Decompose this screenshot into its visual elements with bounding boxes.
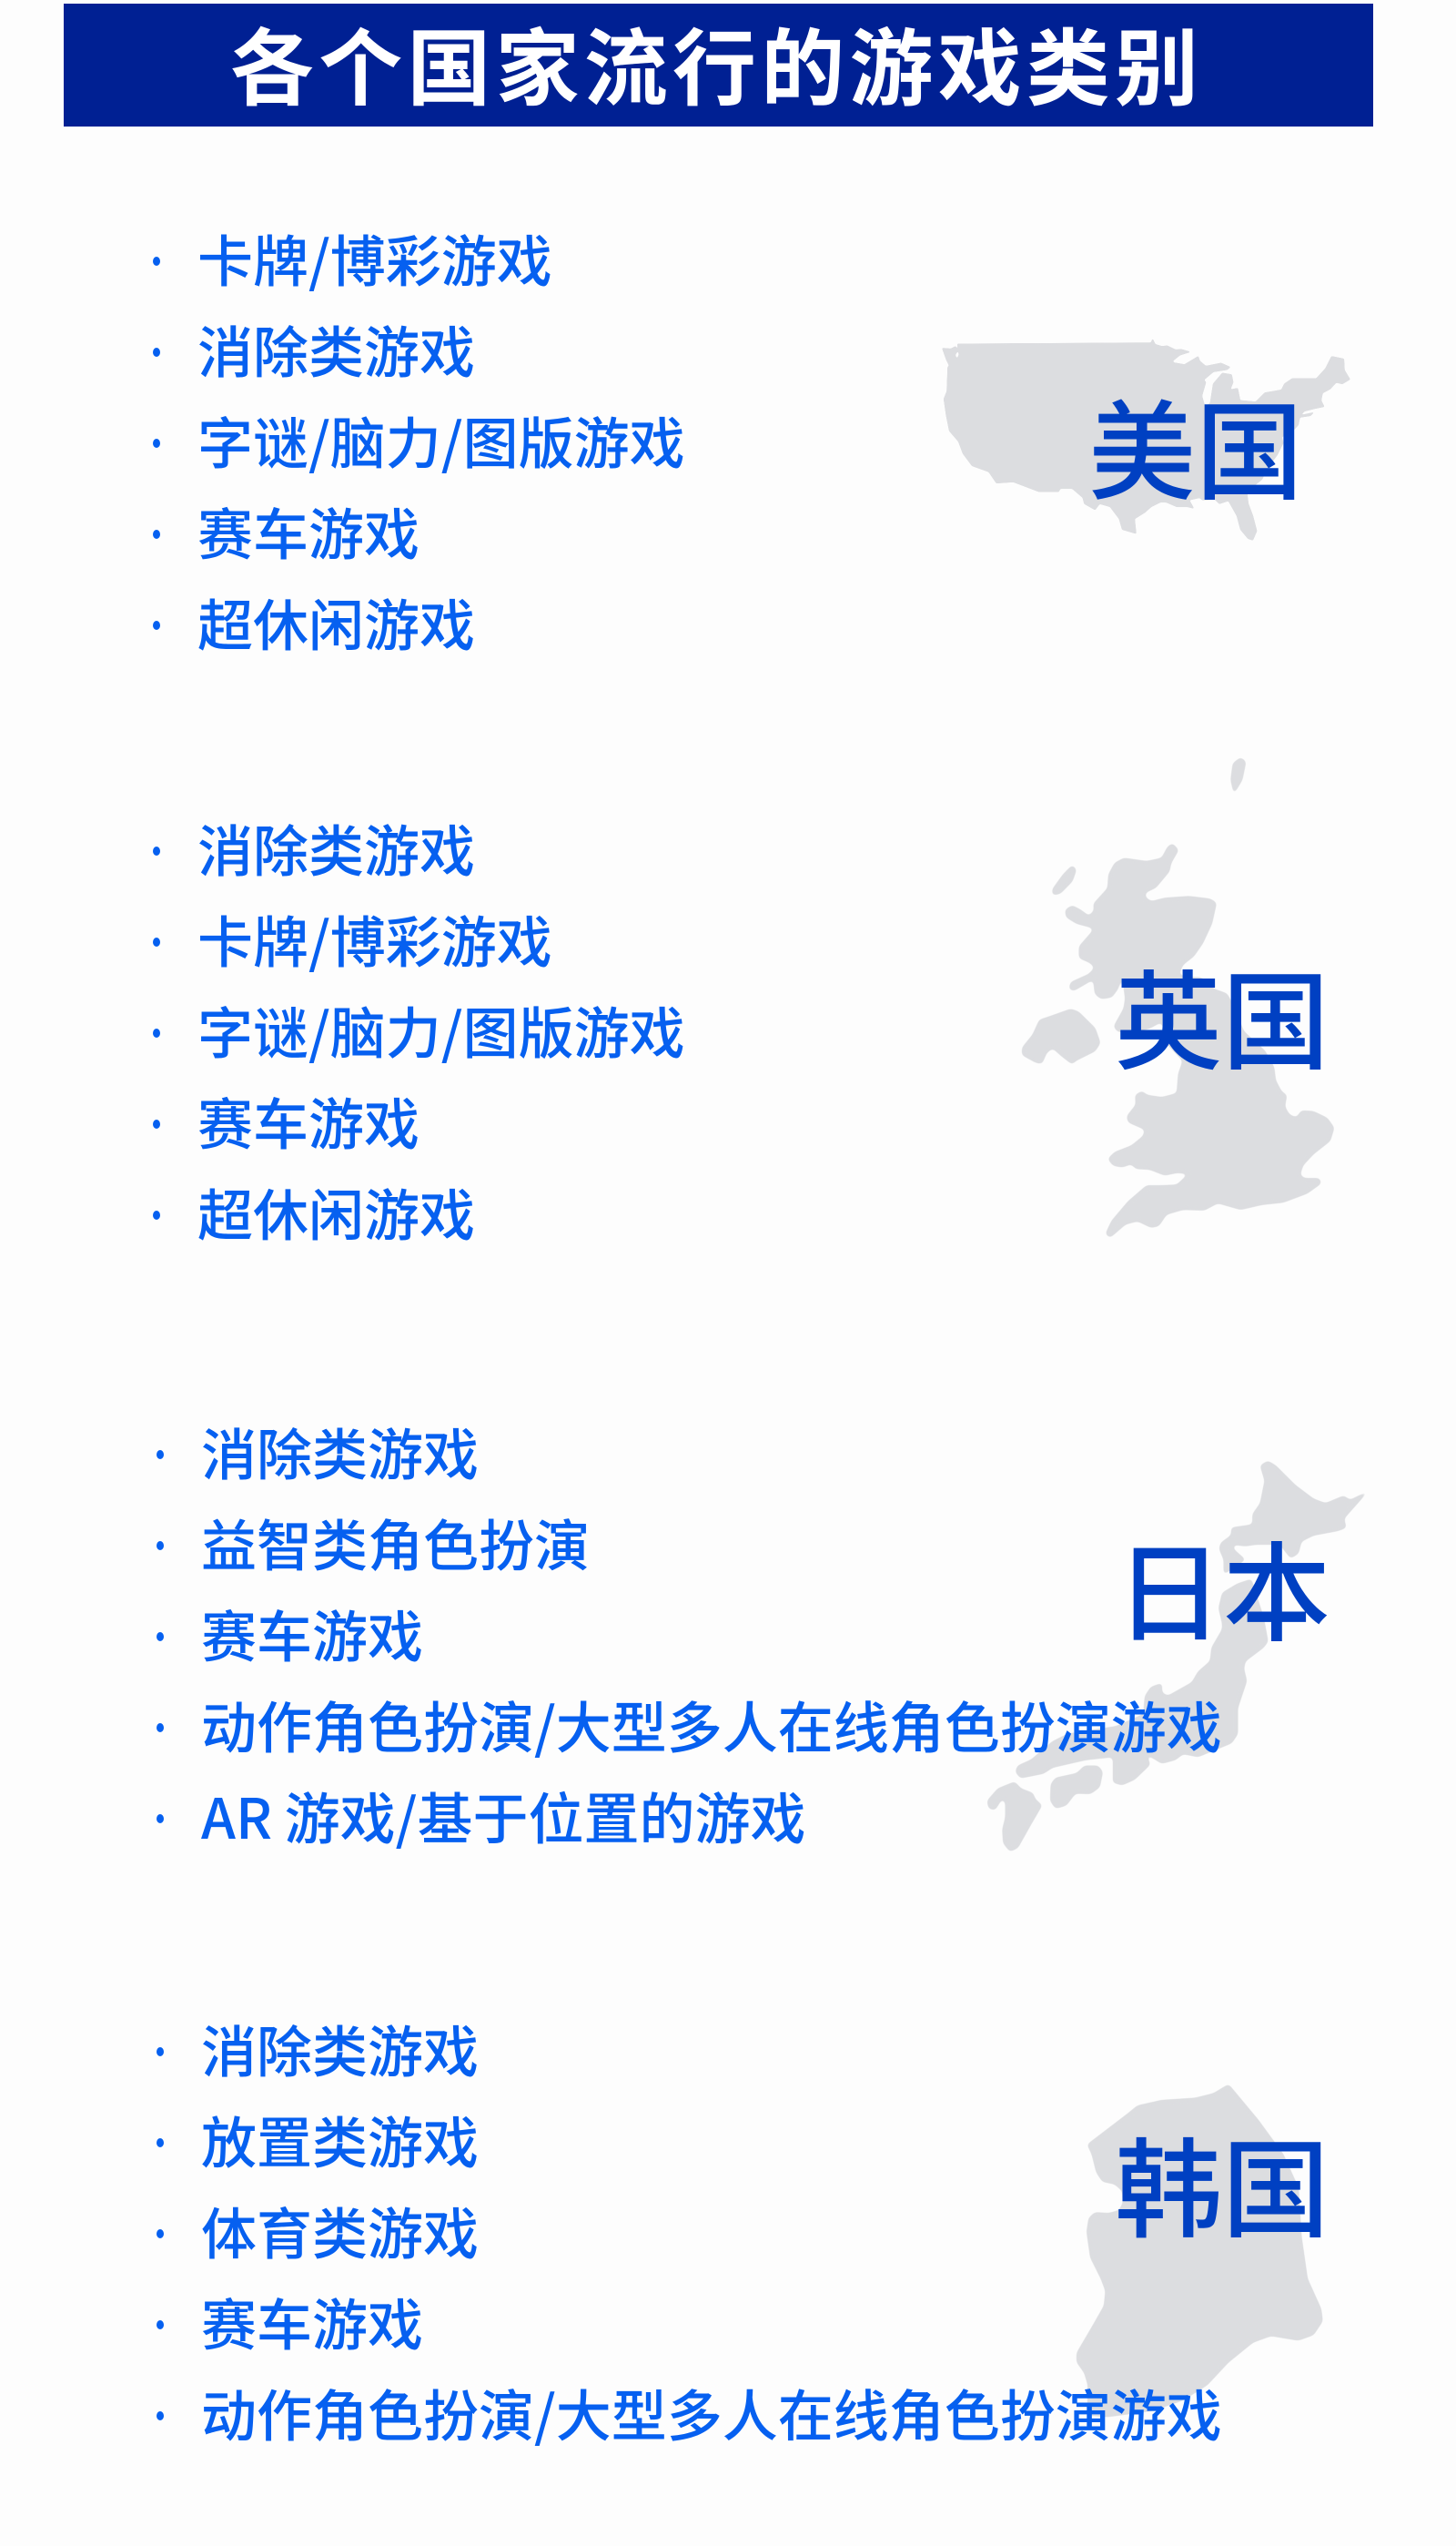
icon: USA map — [943, 340, 1350, 540]
UK list item 4: 赛车游戏 — [197, 1080, 420, 1161]
Japan list item 3: 赛车游戏 — [201, 1592, 423, 1673]
Japan list item 5: AR 游戏/基于位置的游戏 — [201, 1774, 805, 1855]
Korea heading: 韩国 — [1115, 2104, 1330, 2259]
Japan heading: 日本 — [1116, 1507, 1330, 1663]
icon: Korea map — [1077, 2084, 1322, 2417]
USA heading: 美国 — [1088, 366, 1303, 522]
bullets — [153, 257, 164, 2420]
Korea list item 3: 体育类游戏 — [201, 2189, 479, 2270]
UK list item 1: 消除类游戏 — [197, 806, 475, 888]
USA list item 4: 赛车游戏 — [197, 490, 420, 571]
Korea list item 4: 赛车游戏 — [201, 2280, 423, 2361]
UK list item 3: 字谜/脑力/图版游戏 — [197, 989, 685, 1070]
icon: UK map — [1022, 757, 1334, 1237]
title banner — [64, 4, 1373, 127]
icon: Japan map — [987, 1461, 1368, 1851]
USA list item 2: 消除类游戏 — [197, 308, 475, 389]
Korea list item 1: 消除类游戏 — [201, 2007, 479, 2088]
UK heading: 英国 — [1115, 936, 1330, 1091]
UK list item 5: 超休闲游戏 — [197, 1171, 475, 1252]
Korea list item 2: 放置类游戏 — [201, 2098, 479, 2179]
USA list item 5: 超休闲游戏 — [197, 581, 475, 662]
title: 各个国家流行的游戏类别 — [230, 2, 1203, 123]
USA list item 1: 卡牌/博彩游戏 — [197, 217, 552, 298]
USA list item 3: 字谜/脑力/图版游戏 — [197, 399, 685, 480]
Japan list item 4: 动作角色扮演/大型多人在线角色扮演游戏 — [201, 1683, 1222, 1764]
UK list item 2: 卡牌/博彩游戏 — [197, 898, 552, 979]
Japan list item 1: 消除类游戏 — [201, 1410, 479, 1491]
Japan list item 2: 益智类角色扮演 — [201, 1501, 590, 1582]
Korea list item 5: 动作角色扮演/大型多人在线角色扮演游戏 — [201, 2371, 1222, 2452]
